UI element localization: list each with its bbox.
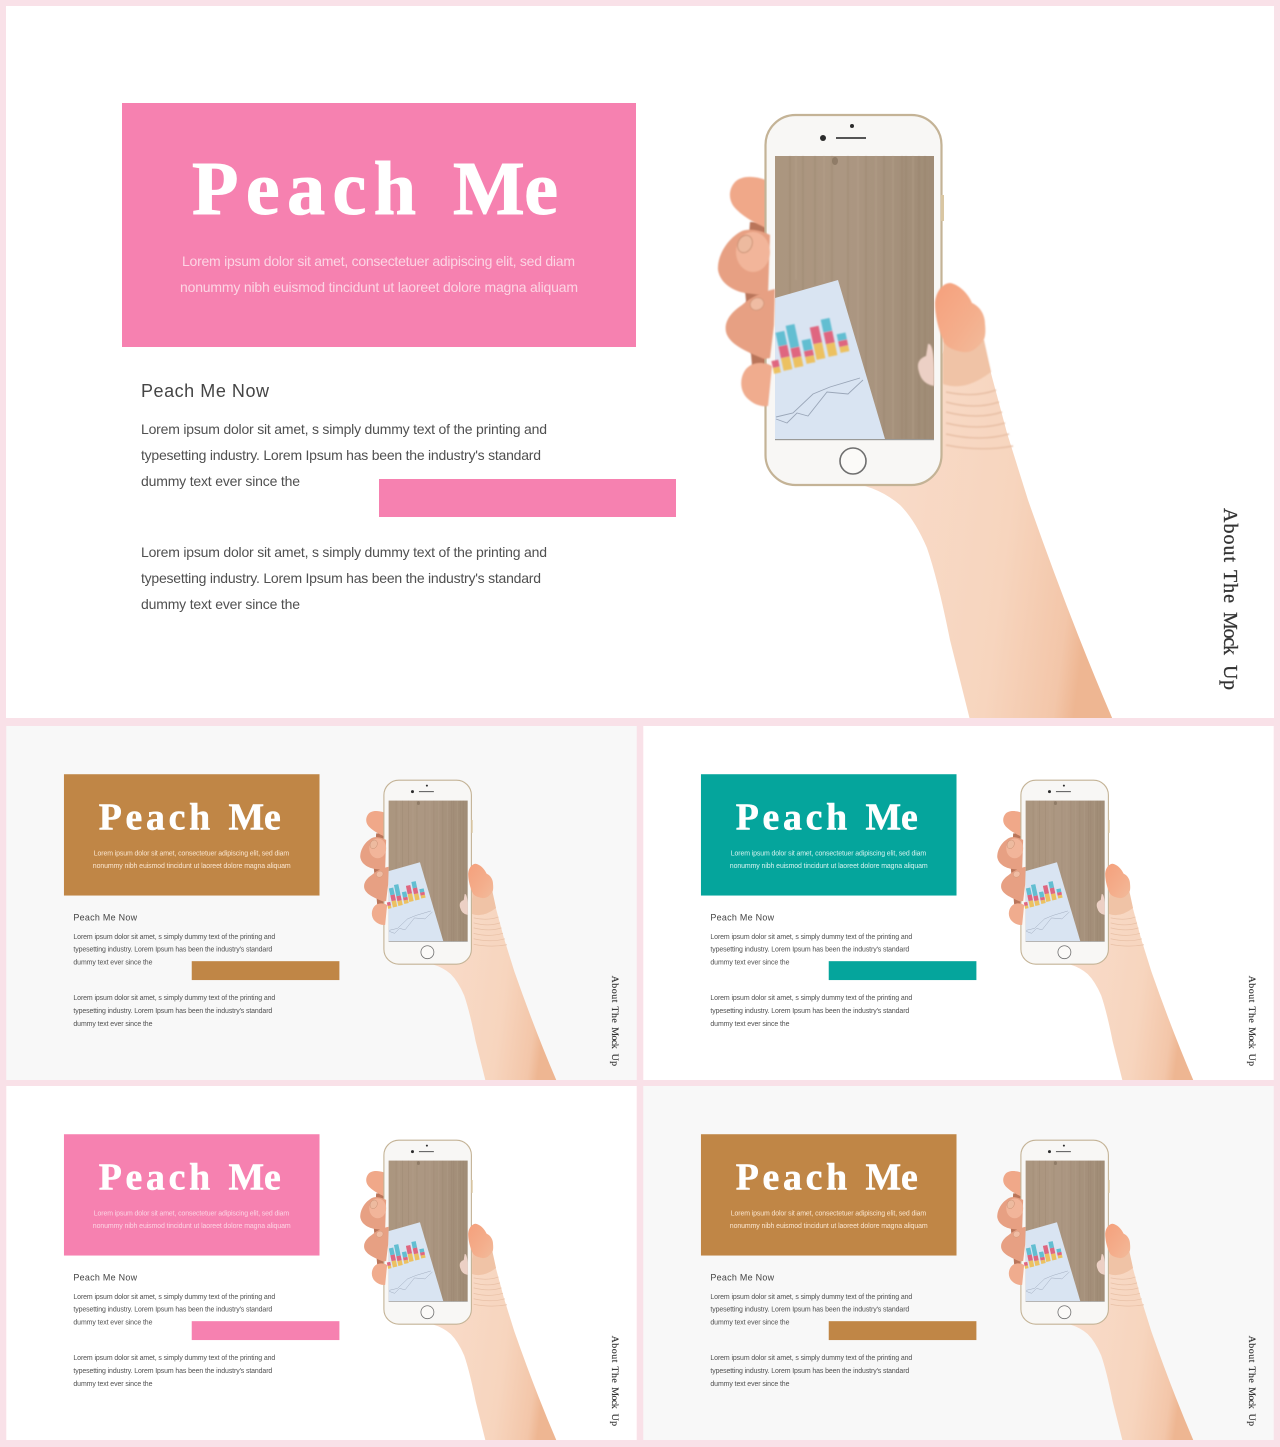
panel: small slide teal bbox=[643, 726, 1274, 1080]
heading: Peach Me Now bbox=[141, 381, 270, 401]
text block: first paragraph: dummy text ever since the bbox=[141, 473, 300, 489]
text block: first paragraph: Lorem ipsum dolor sit amet, s simply dummy text of the printing and bbox=[141, 421, 547, 437]
vertical label: Mock bbox=[609, 1027, 620, 1049]
title box bbox=[122, 103, 636, 347]
text block: first paragraph bbox=[73, 934, 275, 967]
finger shadow bbox=[745, 222, 768, 405]
line chart bbox=[776, 378, 863, 423]
text block: first paragraph bbox=[710, 1294, 912, 1327]
panel: small slide brown grey bbox=[6, 726, 637, 1080]
subtitle line 2: nonummy nibh euismod tincidunt ut laoreet dolore magna aliquam bbox=[93, 863, 291, 870]
text block: first paragraph bbox=[141, 421, 547, 489]
text block: second paragraph: Lorem ipsum dolor sit amet, s simply dummy text of the printing and bbox=[73, 995, 275, 1002]
text block: first paragraph: typesetting industry. Lorem Ipsum has been the industry's standard bbox=[73, 1307, 272, 1314]
vertical label: Up bbox=[1246, 1414, 1257, 1426]
vertical label: Up bbox=[609, 1414, 620, 1426]
vertical label: About bbox=[609, 1336, 620, 1363]
accent bar bbox=[192, 961, 339, 980]
text block: first paragraph: dummy text ever since the bbox=[73, 1320, 153, 1327]
vertical label: The bbox=[609, 1366, 620, 1383]
text block: second paragraph: Lorem ipsum dolor sit amet, s simply dummy text of the printing and bbox=[141, 544, 547, 560]
heading: Peach Me Now bbox=[710, 1272, 775, 1282]
text block: second paragraph: dummy text ever since the bbox=[710, 1021, 790, 1028]
title box bbox=[701, 774, 957, 896]
vertical label: The bbox=[609, 1006, 620, 1023]
text block: second paragraph: typesetting industry. Lorem Ipsum has been the industry's standard bbox=[73, 1368, 272, 1375]
vertical label: The bbox=[1246, 1366, 1257, 1383]
subtitle line 1: Lorem ipsum dolor sit amet, consectetuer adipiscing elit, sed diam bbox=[94, 1210, 289, 1217]
panel: small slide brown on grey lower bbox=[643, 1086, 1274, 1440]
subtitle line 2: nonummy nibh euismod tincidunt ut laoreet dolore magna aliquam bbox=[730, 863, 928, 870]
vertical label: The bbox=[1219, 570, 1241, 603]
subtitle line 1: Lorem ipsum dolor sit amet, consectetuer adipiscing elit, sed diam bbox=[731, 850, 926, 857]
arm bbox=[865, 342, 1113, 720]
accent bar bbox=[379, 479, 676, 517]
vertical label: Up bbox=[1219, 665, 1241, 690]
panel: small slide pink bbox=[6, 1086, 637, 1440]
title: Peach bbox=[736, 1156, 847, 1198]
text block: first paragraph: dummy text ever since the bbox=[710, 960, 790, 967]
title: Me bbox=[866, 796, 918, 838]
stacked bar chart bbox=[771, 318, 849, 374]
text block: first paragraph bbox=[710, 934, 912, 967]
title: Peach bbox=[736, 796, 847, 838]
vertical label: The bbox=[1246, 1006, 1257, 1023]
subtitle line 1: Lorem ipsum dolor sit amet, consectetuer adipiscing elit, sed diam bbox=[94, 850, 289, 857]
text block: first paragraph: typesetting industry. Lorem Ipsum has been the industry's standard bbox=[710, 947, 909, 954]
illustration: hand holding phone bbox=[997, 780, 1194, 1081]
vertical label: About bbox=[1246, 1336, 1257, 1363]
illustration: hand holding phone bbox=[997, 1140, 1194, 1441]
title: Me bbox=[229, 1156, 281, 1198]
text block: second paragraph: Lorem ipsum dolor sit amet, s simply dummy text of the printing and bbox=[73, 1355, 275, 1362]
text block: first paragraph: Lorem ipsum dolor sit amet, s simply dummy text of the printing and bbox=[710, 1294, 912, 1301]
vertical label: Mock bbox=[1219, 612, 1241, 655]
index finger bbox=[730, 177, 766, 228]
finger reflection bbox=[918, 344, 934, 386]
title: Me bbox=[229, 796, 281, 838]
text block: first paragraph: Lorem ipsum dolor sit amet, s simply dummy text of the printing and bbox=[73, 934, 275, 941]
middle finger bbox=[718, 230, 770, 296]
text block: first paragraph: typesetting industry. Lorem Ipsum has been the industry's standard bbox=[141, 447, 541, 463]
thumb base bbox=[943, 340, 991, 386]
palm creases bbox=[946, 390, 1013, 449]
side button bbox=[941, 195, 944, 221]
text block: first paragraph: typesetting industry. Lorem Ipsum has been the industry's standard bbox=[710, 1307, 909, 1314]
text block: first paragraph: Lorem ipsum dolor sit amet, s simply dummy text of the printing and bbox=[73, 1294, 275, 1301]
heading: Peach Me Now bbox=[73, 1272, 138, 1282]
vertical label: Mock bbox=[1246, 1387, 1257, 1409]
illustration: hand holding phone bbox=[360, 780, 557, 1081]
vertical label: About bbox=[609, 976, 620, 1003]
heading: Peach Me Now bbox=[73, 912, 138, 922]
vertical label: About bbox=[1246, 976, 1257, 1003]
subtitle line 1: Lorem ipsum dolor sit amet, consectetuer adipiscing elit, sed diam bbox=[182, 253, 575, 269]
subtitle line 2: nonummy nibh euismod tincidunt ut laoreet dolore magna aliquam bbox=[730, 1223, 928, 1230]
text block: first paragraph bbox=[73, 1294, 275, 1327]
accent bar bbox=[192, 1321, 339, 1340]
vertical label: Mock bbox=[609, 1387, 620, 1409]
illustration: hand holding phone bbox=[718, 115, 1113, 720]
subtitle line 2: nonummy nibh euismod tincidunt ut laoreet dolore magna aliquam bbox=[180, 279, 578, 295]
ring finger bbox=[726, 289, 775, 359]
text block: second paragraph: typesetting industry. Lorem Ipsum has been the industry's standard bbox=[710, 1368, 909, 1375]
text block: second paragraph bbox=[141, 544, 547, 612]
text block: second paragraph: Lorem ipsum dolor sit amet, s simply dummy text of the printing and bbox=[710, 1355, 912, 1362]
accent bar bbox=[829, 961, 976, 980]
text block: second paragraph: typesetting industry. Lorem Ipsum has been the industry's standard bbox=[141, 570, 541, 586]
phone screen bbox=[771, 156, 934, 440]
text block: second paragraph: Lorem ipsum dolor sit amet, s simply dummy text of the printing and bbox=[710, 995, 912, 1002]
text block: first paragraph: Lorem ipsum dolor sit amet, s simply dummy text of the printing and bbox=[710, 934, 912, 941]
text block: second paragraph bbox=[710, 995, 912, 1028]
text block: second paragraph bbox=[710, 1355, 912, 1388]
title box bbox=[701, 1134, 957, 1256]
title box bbox=[64, 1134, 320, 1256]
text block: first paragraph: dummy text ever since the bbox=[710, 1320, 790, 1327]
text block: first paragraph: typesetting industry. Lorem Ipsum has been the industry's standard bbox=[73, 947, 272, 954]
text block: second paragraph bbox=[73, 995, 275, 1028]
panel: main slide pink bbox=[6, 6, 1274, 718]
text block: second paragraph: dummy text ever since the bbox=[73, 1021, 153, 1028]
subtitle line 1: Lorem ipsum dolor sit amet, consectetuer adipiscing elit, sed diam bbox=[731, 1210, 926, 1217]
heading: Peach Me Now bbox=[710, 912, 775, 922]
little finger bbox=[741, 363, 772, 406]
vertical label: About bbox=[1219, 508, 1241, 562]
title box bbox=[64, 774, 320, 896]
title: Me bbox=[866, 1156, 918, 1198]
text block: first paragraph: dummy text ever since the bbox=[73, 960, 153, 967]
title: Peach bbox=[192, 147, 416, 231]
vertical label: Up bbox=[609, 1054, 620, 1066]
text block: second paragraph: typesetting industry. Lorem Ipsum has been the industry's standard bbox=[710, 1008, 909, 1015]
title: Peach bbox=[99, 1156, 210, 1198]
thumb bbox=[935, 283, 985, 352]
illustration: hand holding phone bbox=[360, 1140, 557, 1441]
text block: second paragraph bbox=[73, 1355, 275, 1388]
text block: second paragraph: dummy text ever since the bbox=[710, 1381, 790, 1388]
text block: second paragraph: dummy text ever since the bbox=[73, 1381, 153, 1388]
title: Peach bbox=[99, 796, 210, 838]
text block: second paragraph: typesetting industry. Lorem Ipsum has been the industry's standard bbox=[73, 1008, 272, 1015]
accent bar bbox=[829, 1321, 976, 1340]
home button bbox=[840, 448, 866, 474]
vertical label: Mock bbox=[1246, 1027, 1257, 1049]
screen lower edge bbox=[775, 439, 934, 440]
title: Me bbox=[453, 147, 558, 231]
text block: second paragraph: dummy text ever since the bbox=[141, 596, 300, 612]
subtitle line 2: nonummy nibh euismod tincidunt ut laoreet dolore magna aliquam bbox=[93, 1223, 291, 1230]
camera, sensor and speaker bbox=[820, 124, 866, 141]
vertical label: Up bbox=[1246, 1054, 1257, 1066]
phone body bbox=[766, 115, 942, 485]
chart paper bbox=[775, 280, 885, 439]
